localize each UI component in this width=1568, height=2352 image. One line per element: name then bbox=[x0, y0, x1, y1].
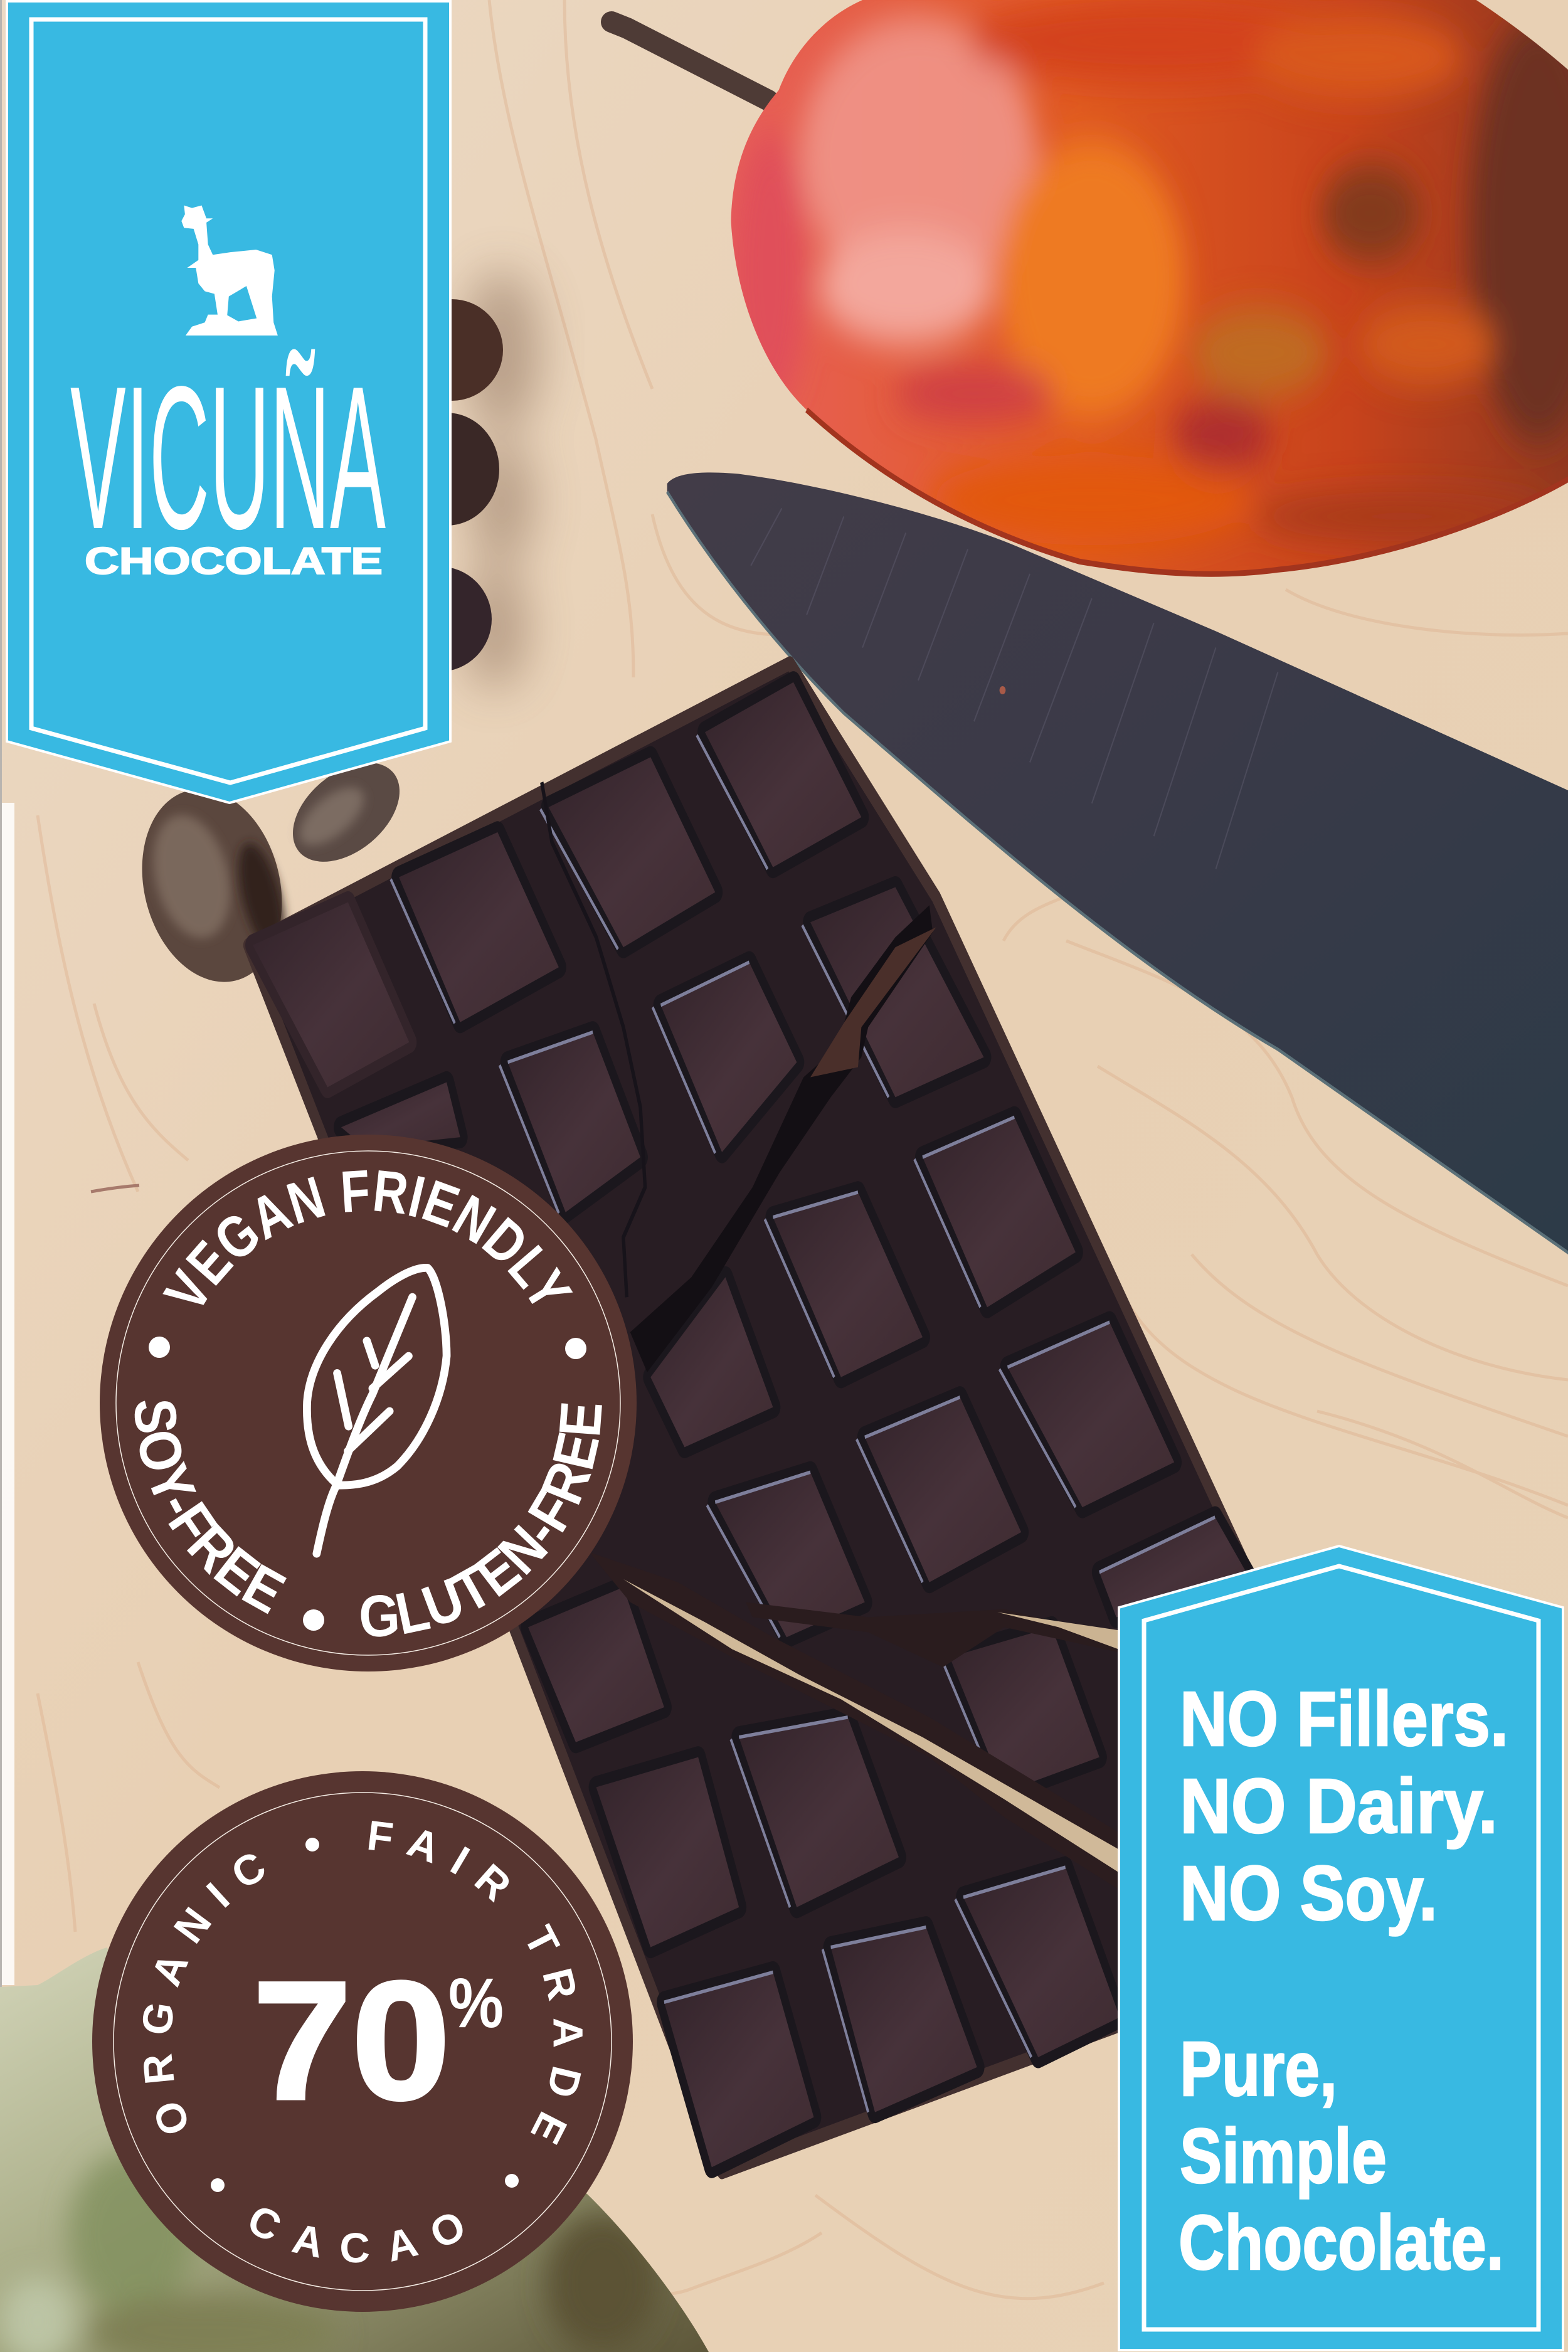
panel: no fillers claims bbox=[1119, 1546, 1563, 2350]
crack: diagonal slash bbox=[630, 905, 933, 1372]
crack: lower slash revealing wood bbox=[590, 1552, 1118, 1889]
claims text: NO Dairy. bbox=[1180, 1764, 1498, 1850]
cocoa pod with stem bbox=[612, 0, 1568, 574]
panel inner frame bbox=[1144, 1566, 1539, 2329]
curved label: vegan friendly: VEGAN FRIENDLY bbox=[162, 1170, 573, 1305]
badge inner ring bbox=[116, 1151, 620, 1655]
badge disc bbox=[92, 1771, 633, 2312]
bean: small bbox=[274, 743, 418, 881]
pod stem bbox=[612, 22, 768, 100]
icon: leaf bbox=[307, 1268, 447, 1554]
badge: vegan friendly bbox=[100, 1135, 637, 1671]
bullet separators bbox=[211, 1838, 519, 2192]
banner: vicuña logo bbox=[7, 1, 450, 803]
pod body bbox=[731, 0, 1568, 574]
claims text: NO Fillers. bbox=[1180, 1677, 1508, 1762]
badge: 70% organic fair trade cacao bbox=[92, 1771, 633, 2312]
claims text: Pure, bbox=[1180, 2026, 1337, 2112]
bar slab bbox=[248, 663, 1303, 2172]
chocolate squares bbox=[253, 682, 1249, 2167]
green cacao pod bbox=[0, 1947, 709, 2352]
banner inner frame bbox=[31, 19, 425, 783]
claims text: Simple bbox=[1180, 2114, 1387, 2200]
crack: chocolate shards bbox=[810, 927, 936, 1077]
text: VICUÑA bbox=[70, 344, 386, 571]
crack: upper branch bbox=[746, 1602, 1118, 1667]
curved label: fair trade: FAIR TRADE bbox=[369, 1821, 583, 2145]
bean: lower bbox=[386, 566, 492, 672]
brand subtitle: CHOCOLATE bbox=[85, 540, 383, 582]
curved label: gluten-free: GLUTEN-FREE bbox=[361, 1403, 602, 1637]
icon: alpaca silhouette bbox=[181, 206, 278, 336]
badge inner ring bbox=[114, 1793, 612, 2291]
bean: upper bbox=[400, 299, 503, 401]
percent sign: % bbox=[448, 1964, 504, 2042]
claims text bbox=[1179, 1677, 1508, 2286]
shadow under the beans bbox=[464, 270, 539, 690]
bean: middle bbox=[394, 413, 499, 526]
dark chocolate bar bbox=[248, 663, 1303, 2172]
bean: large bbox=[122, 775, 302, 997]
cacao beans bbox=[122, 299, 503, 997]
percentage number: 70 bbox=[253, 1946, 450, 2134]
curved label: cacao: CACAO bbox=[250, 2208, 463, 2263]
bullet separators bbox=[149, 1337, 586, 1631]
claims text: Chocolate. bbox=[1179, 2200, 1504, 2286]
panel shape bbox=[1119, 1546, 1563, 2350]
badge disc bbox=[100, 1135, 637, 1671]
curved label: organic: ORGANIC bbox=[143, 1854, 265, 2134]
claims text: NO Soy. bbox=[1180, 1851, 1438, 1937]
banner ribbon bbox=[7, 1, 450, 803]
chef's knife blade bbox=[667, 472, 1568, 1266]
crack: thin left fissure bbox=[542, 782, 645, 1297]
curved label: soy-free: SOY-FREE bbox=[134, 1401, 287, 1614]
